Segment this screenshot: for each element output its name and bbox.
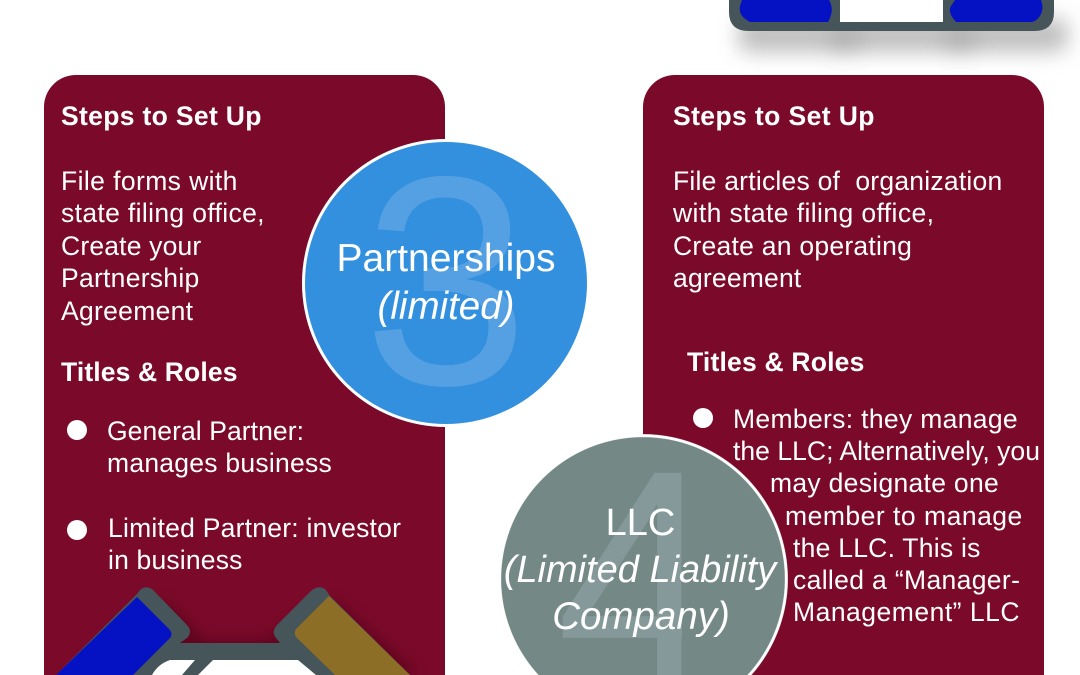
text block: limited partner: Limited Partner: investor [108,512,401,542]
panel: LLC [643,75,1044,675]
icon: bottom left graphic [56,587,414,675]
text block: general partner: General Partner: [107,416,304,446]
text block: members: called a “Manager- [793,565,1020,595]
text block: partnership steps: state filing office, [61,198,265,228]
heading: titles and roles right: Titles & Roles [687,347,865,377]
text block: LLC steps: with state filing office, [673,198,934,228]
text block: LLC steps [673,166,1002,293]
icon: top right graphic [728,0,1078,65]
text block: partnership steps: File forms with [61,166,238,196]
text block: LLC steps: File articles of organization [673,166,1002,196]
circle: partnerships [302,139,590,427]
text block: members [733,404,1040,627]
text block: partnership steps: Agreement [61,296,193,326]
text block: members: member to manage [785,501,1023,531]
bullet: general partner [67,420,87,440]
heading: titles and roles left: Titles & Roles [61,357,238,387]
text block: members: the LLC. This is [793,533,981,563]
heading: steps to set up right: Steps to Set Up [673,101,875,131]
bullet: members [693,408,713,428]
bullet: limited partner [67,520,87,540]
text block: general partner: manages business [107,448,332,478]
text block: limited partner [108,512,401,575]
text block: LLC steps: agreement [673,263,802,293]
label: LLC: LLC [606,502,675,544]
label: company: Company) [552,595,730,638]
circle: LLC [498,434,788,675]
label: limited liability: (Limited Liability [504,549,776,591]
text block: members: may designate one [770,468,999,498]
text block: members: Management” LLC [793,597,1020,627]
text block: partnership steps: Partnership [61,263,200,293]
text block: members: the LLC; Alternatively, you [733,436,1040,466]
text block: members: Members: they manage [733,404,1018,434]
text block: partnership steps [61,166,265,326]
label: limited: (limited) [378,285,514,328]
text block: LLC steps: Create an operating [673,231,912,261]
text block: limited partner: in business [108,545,243,575]
label: partnerships: Partnerships [337,237,555,280]
panel: partnerships [44,75,445,675]
text block: general partner [107,416,332,478]
text block: partnership steps: Create your [61,231,201,261]
heading: steps to set up left: Steps to Set Up [61,101,262,131]
